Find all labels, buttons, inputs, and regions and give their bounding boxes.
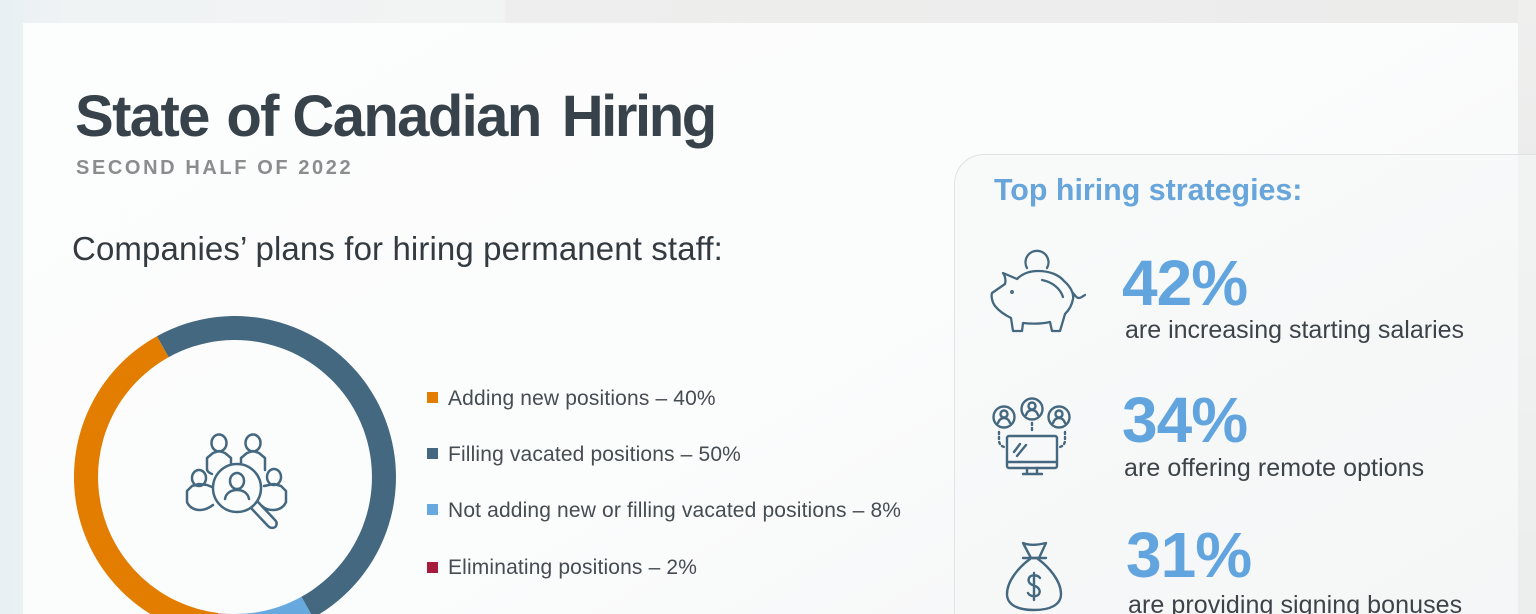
icon: money bag bbox=[1006, 542, 1062, 612]
segment: not adding 8% bbox=[235, 597, 311, 614]
icon: piggy bank bbox=[990, 250, 1086, 332]
stat: 42% bbox=[1122, 247, 1464, 344]
donut chart bbox=[74, 316, 396, 614]
value: 42% bbox=[1122, 247, 1247, 319]
icon: remote work bbox=[992, 397, 1071, 476]
legend item: not adding: Not adding new or filling vacated positions – 8% bbox=[448, 499, 901, 522]
right background strip bbox=[1518, 0, 1536, 614]
label: are offering remote options bbox=[1124, 454, 1424, 482]
stat: 31% bbox=[1126, 522, 1462, 614]
legend item: adding: Adding new positions – 40% bbox=[448, 387, 716, 410]
value: 34% bbox=[1122, 384, 1247, 456]
legend item: filling: Filling vacated positions – 50% bbox=[448, 443, 741, 466]
segment: eliminating 2% bbox=[218, 613, 235, 614]
subtitle: SECOND HALF OF 2022 bbox=[76, 157, 353, 179]
icon: people search bbox=[186, 433, 288, 530]
title: State of Canadian Hiring bbox=[75, 84, 715, 149]
chart heading: Companies’ plans for hiring permanent staff: bbox=[72, 230, 723, 267]
panel: top hiring strategies bbox=[954, 154, 1536, 614]
legend item: eliminating: Eliminating positions – 2% bbox=[448, 556, 697, 579]
strategies heading: Top hiring strategies: bbox=[994, 173, 1302, 207]
segment: adding 40% bbox=[74, 336, 218, 614]
legend bbox=[427, 387, 901, 579]
stat: 34% bbox=[1122, 384, 1424, 482]
label: are increasing starting salaries bbox=[1125, 316, 1464, 344]
segment: filling vacated 50% bbox=[157, 316, 396, 614]
